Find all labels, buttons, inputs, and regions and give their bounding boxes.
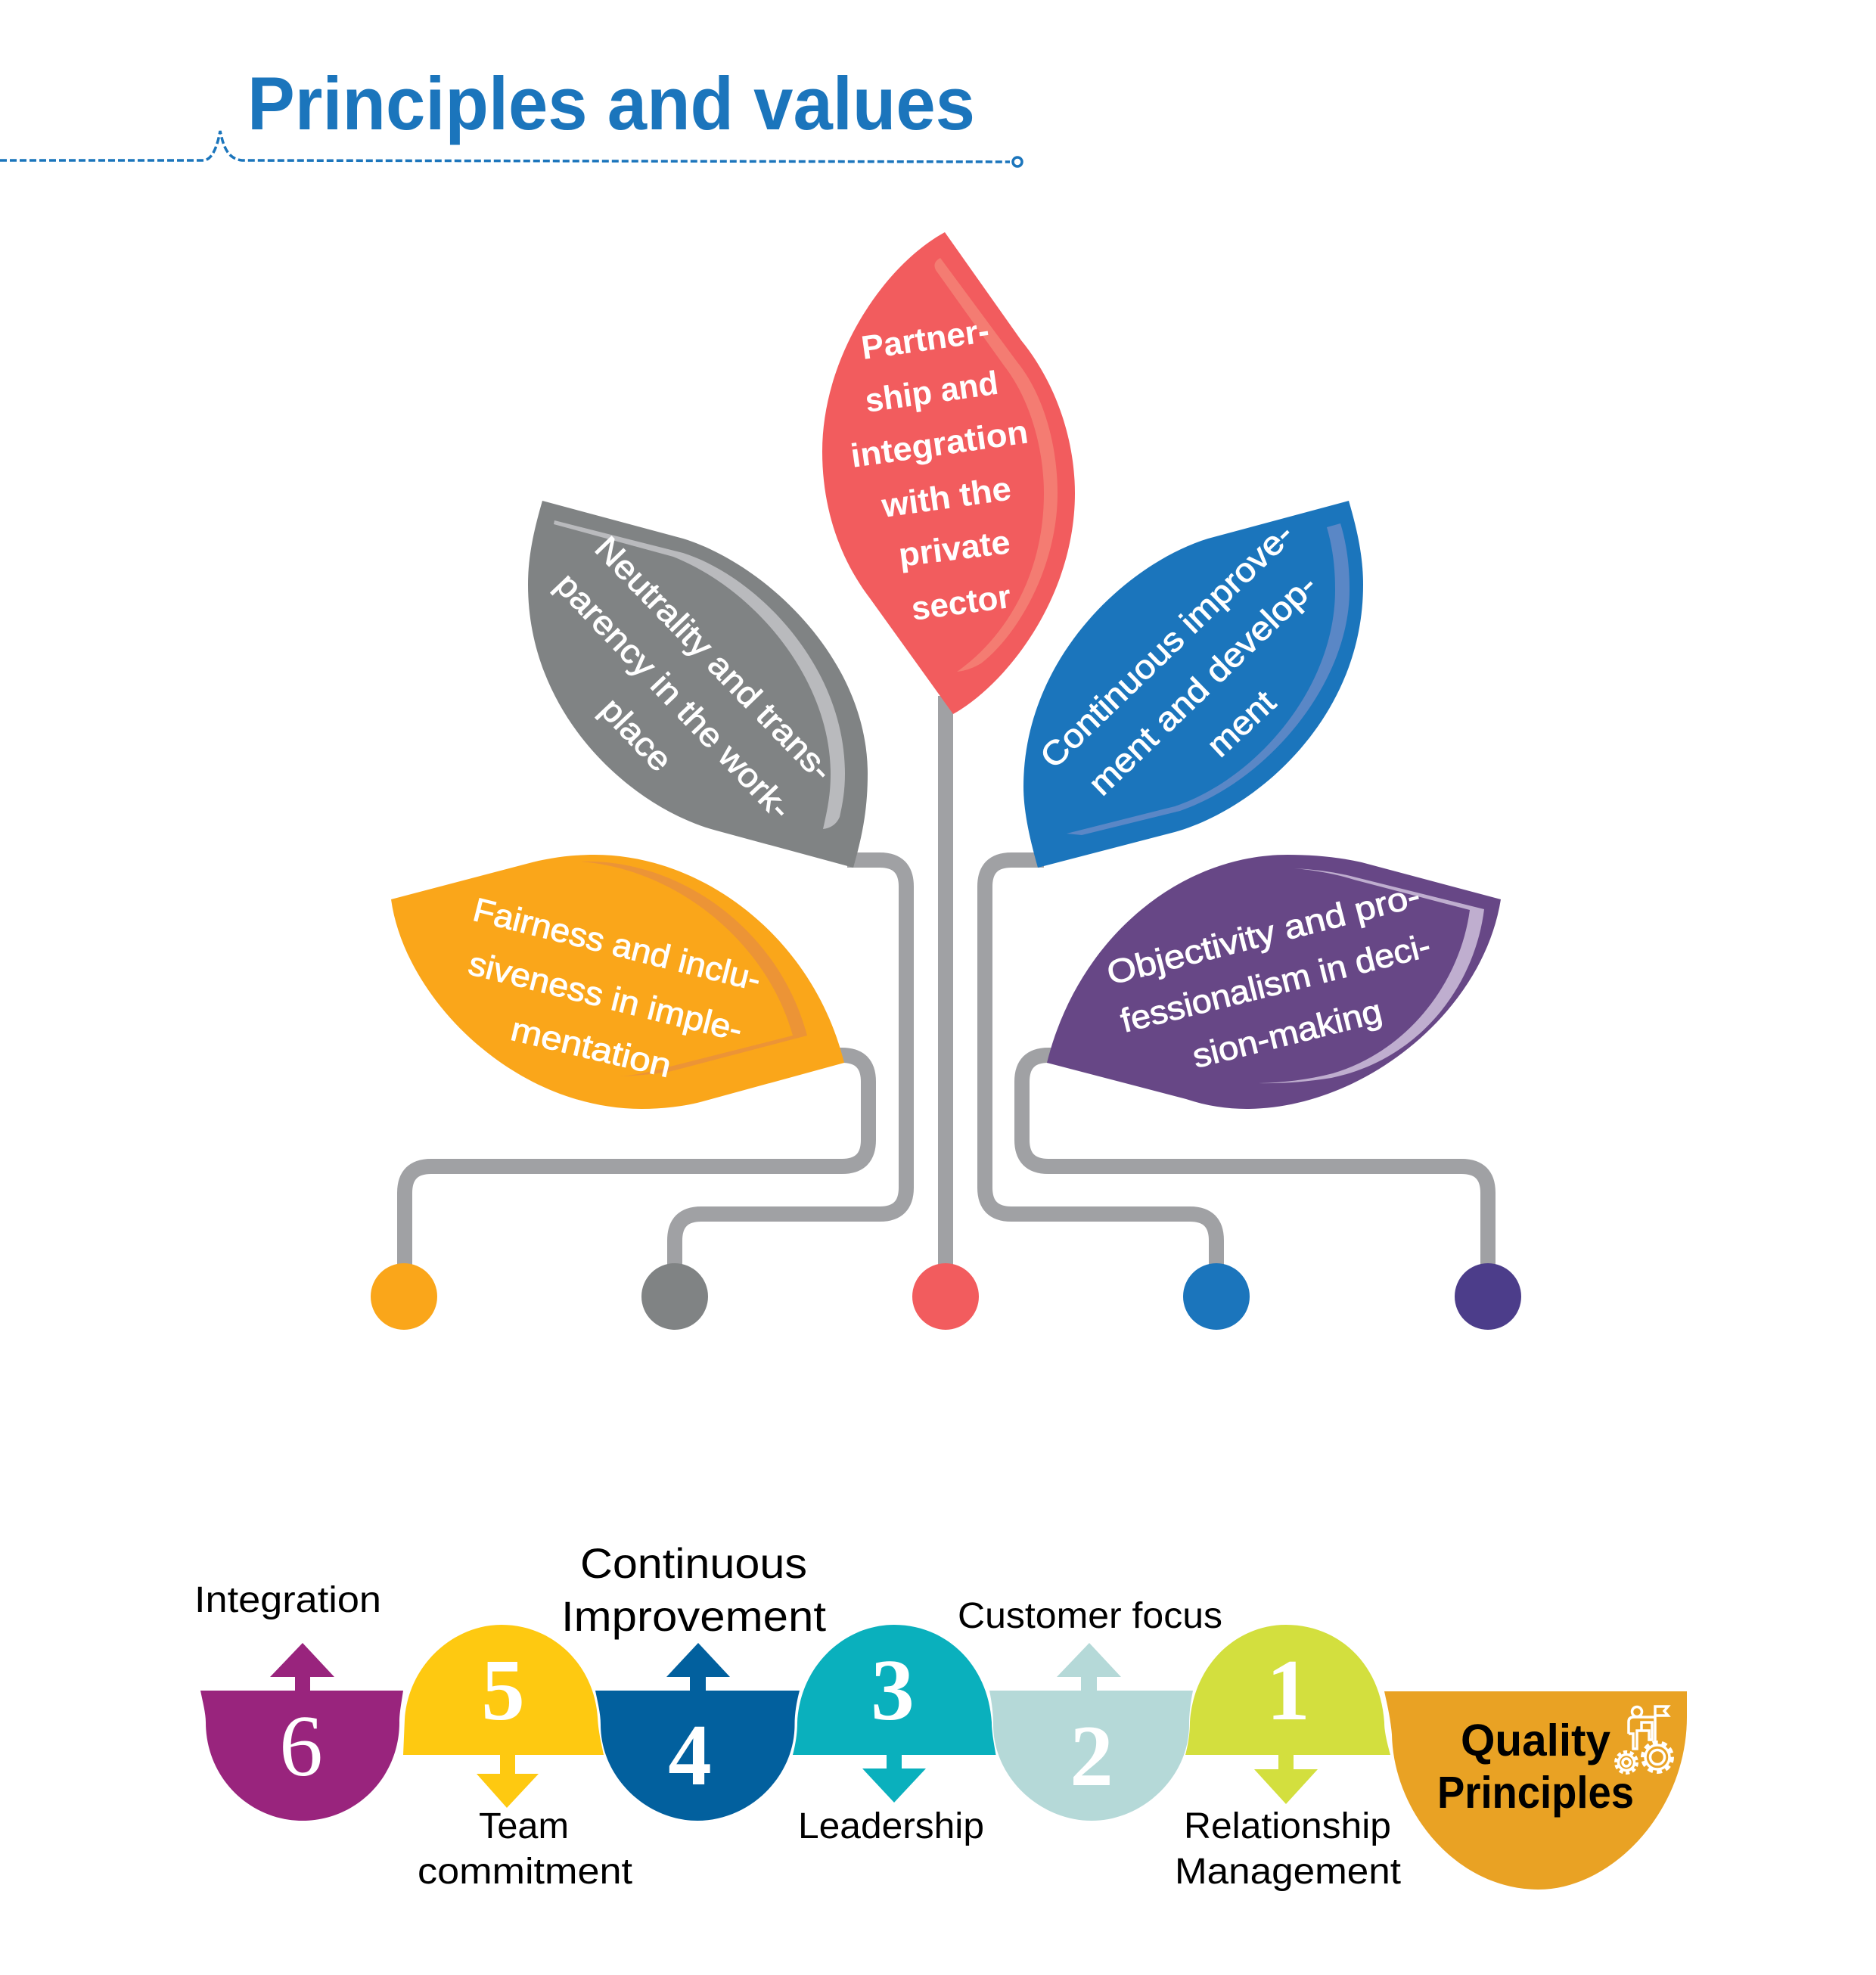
quality principles panel: Quality (1461, 1716, 1610, 1765)
leaf: neutrality (grey): Neutrality and trans- (588, 529, 840, 789)
leaf: partnership (red): Partner- (859, 312, 992, 367)
leaf: neutrality (grey): parency in the work- (548, 566, 799, 827)
label: continuous improvement: Improvement (561, 1592, 826, 1640)
node: blue (1183, 1263, 1250, 1330)
leaf: partnership (red): integration (849, 414, 1030, 475)
step 5: team commitment: 5 (481, 1642, 525, 1738)
title: Principles and values (247, 61, 975, 145)
label: continuous improvement: Continuous (580, 1539, 807, 1587)
step 3: leadership (793, 1625, 995, 1803)
node: purple (1455, 1263, 1521, 1330)
label: customer focus: Customer focus (958, 1596, 1222, 1636)
leaf: continuous improvement (blue): ment and develop- (1082, 567, 1324, 803)
label: team commitment (418, 1806, 632, 1892)
leaf: neutrality (grey): place (593, 691, 679, 779)
step 3: leadership: 3 (871, 1642, 915, 1738)
leaf: continuous improvement (blue) (1023, 501, 1363, 868)
leaf: partnership (red): with the (879, 470, 1014, 525)
leaf: fairness (orange) (391, 855, 844, 1109)
step 1: relationship management (1185, 1625, 1390, 1804)
step 6: integration (200, 1643, 403, 1821)
step 6: integration: 6 (279, 1698, 323, 1794)
leaf: fairness (orange): Fairness and inclu- (470, 891, 765, 998)
step 2: customer focus (989, 1643, 1193, 1821)
label: leadership: Leadership (798, 1806, 984, 1846)
quality principles panel (1384, 1691, 1687, 1890)
title dashed underline (0, 131, 1022, 166)
leaf: fairness (orange): mentation (508, 1011, 675, 1085)
leaf: partnership (red): sector (909, 578, 1013, 628)
label: relationship management: Relationship (1184, 1806, 1391, 1846)
icon: person with flag on gears (1616, 1706, 1672, 1773)
step 4: continuous improvement: 4 (668, 1707, 712, 1803)
leaf: objectivity (purple): Objectivity and pro- (1103, 877, 1424, 992)
label: team commitment: commitment (418, 1852, 632, 1892)
label: relationship management (1175, 1806, 1401, 1892)
step 2: customer focus: 2 (1070, 1708, 1113, 1804)
connector pipe: blue (985, 860, 1216, 1286)
node: orange (371, 1263, 437, 1330)
label: relationship management: Management (1175, 1852, 1401, 1892)
quality principles panel: Principles (1437, 1768, 1634, 1818)
connector pipe: orange (405, 1055, 868, 1286)
label: team commitment: Team (479, 1806, 569, 1846)
label: continuous improvement (561, 1539, 826, 1640)
connector pipe: grey (675, 860, 906, 1286)
leaf: partnership (red): ship and (863, 365, 1001, 420)
node: red (912, 1263, 979, 1330)
step 1: relationship management: 1 (1266, 1642, 1310, 1738)
leaf: fairness (orange): siveness in imple- (465, 945, 746, 1048)
leaf: continuous improvement (blue): ment (1200, 684, 1283, 764)
connector pipe: red (938, 696, 953, 1286)
leaf: objectivity (purple): sion-making (1189, 992, 1386, 1076)
leaf: partnership (red): private (896, 523, 1012, 574)
connector pipe: purple (1022, 1055, 1488, 1286)
leaf: neutrality (grey) (528, 501, 868, 868)
leaf: objectivity (purple) (1047, 855, 1501, 1109)
step 5: team commitment (403, 1625, 604, 1808)
label: integration: Integration (194, 1580, 381, 1620)
step 4: continuous improvement (595, 1643, 800, 1821)
node: grey (641, 1263, 708, 1330)
leaf: partnership (red) (822, 232, 1075, 714)
leaf: objectivity (purple): fessionalism in deci- (1117, 927, 1434, 1040)
leaf: continuous improvement (blue): Continuous improve- (1033, 516, 1300, 775)
